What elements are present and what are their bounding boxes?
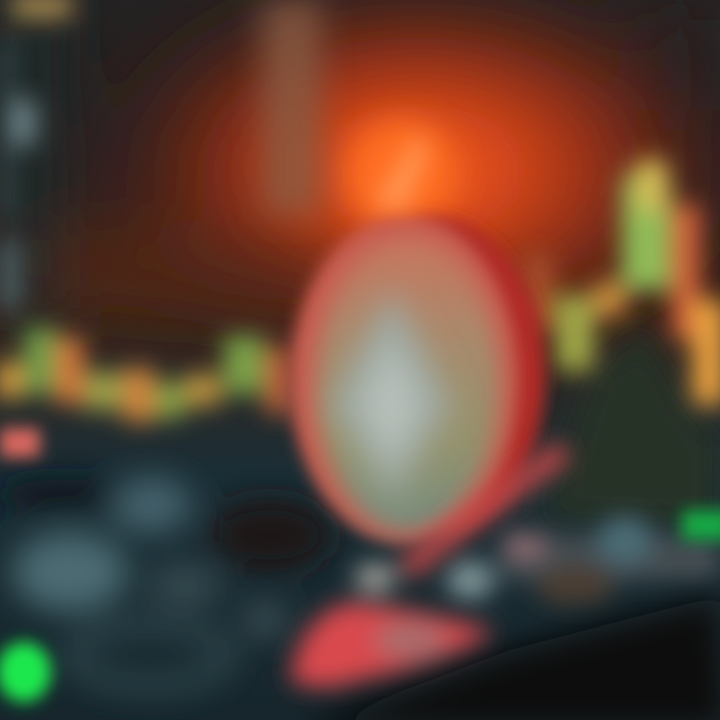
left edge chart fragments [0,0,72,310]
bottom right black shadow [300,595,720,720]
flame streak [375,135,428,212]
lower right bokeh [446,516,720,605]
orange glow [0,0,720,380]
lower left bokeh rocks [0,477,332,685]
green block right [682,510,720,540]
left candlestick line [0,328,292,422]
coin red rim [290,215,546,543]
coin face [316,237,500,533]
ethereum diamond [330,290,452,500]
right dark mountain [540,320,720,530]
vertical light streak [262,0,322,215]
right candlestick line [522,160,720,405]
glow core [345,120,455,230]
green glow bottom left [0,642,51,702]
red ribbon [290,450,565,688]
red label left [0,428,40,458]
coin [290,215,546,543]
